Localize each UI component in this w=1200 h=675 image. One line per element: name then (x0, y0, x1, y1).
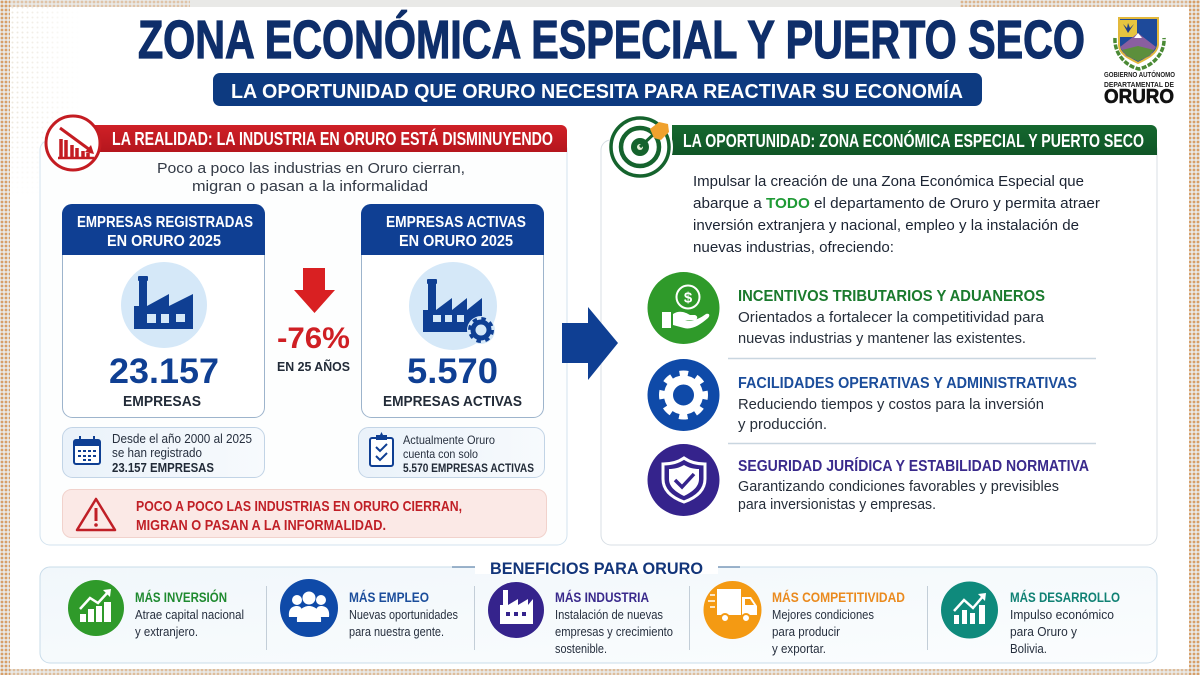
logo: Gobierno de Oruro (1104, 18, 1175, 108)
icon: factory with gear (409, 262, 497, 350)
benefit: inversion (68, 580, 244, 639)
intro paragraph: Impulsar la creación de una Zona Económica Especial que (693, 173, 1084, 190)
benefit: desarrollo: Bolivia. (1010, 642, 1047, 656)
arrow: red down (294, 268, 335, 313)
intro paragraph: inversión extranjera y nacional, empleo y la instalación de (693, 217, 1079, 234)
logo: Gobierno de Oruro: GOBIERNO AUTÓNOMO (1104, 70, 1175, 79)
benefit: inversion: MÁS INVERSIÓN (135, 590, 227, 605)
benefit: desarrollo: para Oruro y (1010, 625, 1078, 639)
icon: hand with coin: $ (684, 290, 693, 306)
item: seguridad: SEGURIDAD JURÍDICA Y ESTABILIDAD NORMATIVA (738, 458, 1089, 475)
benefit: empleo: MÁS EMPLEO (349, 590, 429, 605)
intro paragraph: nuevas industrias, ofreciendo: (693, 239, 894, 256)
note: registered companies: se han registrado (112, 446, 202, 460)
note: active companies (358, 428, 544, 478)
benefit: desarrollo (941, 582, 1120, 656)
item: incentivos (648, 272, 1045, 347)
benefit: desarrollo: MÁS DESARROLLO (1010, 590, 1120, 605)
subtitle banner: LA OPORTUNIDAD QUE ORURO NECESITA PARA REACTIVAR SU ECONOMÍA (231, 80, 963, 103)
note: active companies: cuenta con solo (403, 447, 478, 461)
icon: declining industry (46, 116, 100, 170)
benefit: empleo: Nuevas oportunidades (349, 608, 458, 622)
note: active companies: 5.570 EMPRESAS ACTIVAS (403, 461, 534, 475)
item: incentivos: INCENTIVOS TRIBUTARIOS Y ADUANEROS (738, 288, 1045, 305)
red heading bar (90, 125, 567, 152)
benefit: competitividad: para producir (772, 625, 840, 639)
card: empresas registradas: EMPRESAS (123, 393, 201, 410)
item: seguridad (648, 444, 1089, 516)
logo: Gobierno de Oruro: DEPARTAMENTAL DE (1104, 80, 1174, 89)
card: empresas registradas: EMPRESAS REGISTRADAS (77, 214, 253, 231)
alert box (62, 490, 546, 538)
benefit: industria: MÁS INDUSTRIA (555, 590, 649, 605)
panel box (40, 140, 567, 545)
note: registered companies: Desde el año 2000 al 2025 (112, 432, 252, 446)
card: empresas activas: EMPRESAS ACTIVAS (383, 393, 522, 410)
alert box: POCO A POCO LAS INDUSTRIAS EN ORURO CIERRAN, (136, 498, 462, 515)
icon: target with dart (609, 115, 673, 179)
benefit: empleo: para nuestra gente. (349, 625, 444, 639)
benefit: industria (488, 582, 673, 656)
icon: development chart (941, 582, 998, 638)
card: empresas activas (361, 204, 544, 418)
logo: Gobierno de Oruro: ORURO (1104, 86, 1174, 108)
item: facilidades: FACILIDADES OPERATIVAS Y ADMINISTRATIVAS (738, 375, 1077, 392)
benefit: competitividad: Mejores condiciones (772, 608, 874, 622)
icon: factory (121, 262, 207, 348)
icon: hand with coin (648, 272, 720, 344)
benefit: competitividad: y exportar. (772, 642, 826, 656)
item: seguridad: para inversionistas y empresas. (738, 496, 936, 513)
decline indicator: EN 25 AÑOS (277, 359, 350, 374)
card: empresas activas: 5.570 (407, 352, 498, 391)
icon: factory (488, 582, 544, 638)
benefit: industria: sostenible. (555, 642, 607, 656)
intro paragraph (693, 173, 1100, 256)
note: registered companies: 23.157 EMPRESAS (112, 461, 214, 475)
benefit: desarrollo: Impulso económico (1010, 608, 1114, 622)
panel: la realidad (40, 116, 567, 545)
arrow: reality to opportunity (562, 307, 618, 380)
benefit: industria: empresas y crecimiento (555, 625, 673, 639)
icon: truck (704, 581, 762, 639)
benefit: competitividad: MÁS COMPETITIVIDAD (772, 590, 905, 605)
green heading bar (672, 125, 1157, 155)
benefit: industria: Instalación de nuevas (555, 608, 663, 622)
icon: shield with check (648, 444, 720, 516)
benefit: empleo (280, 579, 458, 639)
panel: beneficios (40, 559, 1157, 663)
card: empresas registradas: 23.157 (109, 352, 219, 391)
icon: gear (648, 359, 720, 431)
alert box: MIGRAN O PASAN A LA INFORMALIDAD. (136, 517, 386, 534)
card: empresas registradas (62, 204, 265, 418)
intro paragraph: abarque a TODO el departamento de Oruro y permita atraer (693, 195, 1100, 212)
note: active companies: Actualmente Oruro (403, 433, 495, 447)
benefit: inversion: Atrae capital nacional (135, 608, 244, 622)
heading: BENEFICIOS PARA ORURO (490, 559, 703, 578)
panel: la oportunidad (601, 115, 1157, 545)
icon: growth chart (68, 580, 124, 636)
intro text (157, 160, 465, 195)
note: registered companies (62, 428, 264, 478)
item: facilidades (648, 359, 1077, 433)
intro text: Poco a poco las industrias en Oruro cierran, (157, 160, 465, 177)
card: empresas registradas: EN ORURO 2025 (107, 233, 221, 250)
item: incentivos: Orientados a fortalecer la competitividad para (738, 309, 1045, 326)
subtitle banner (213, 73, 982, 106)
red heading bar: LA REALIDAD: LA INDUSTRIA EN ORURO ESTÁ DISMINUYENDO (112, 128, 553, 149)
card: empresas activas: EN ORURO 2025 (399, 233, 513, 250)
icon: people (280, 579, 338, 637)
icon: warning triangle (77, 499, 115, 530)
item: facilidades: Reduciendo tiempos y costos para la inversión (738, 396, 1044, 413)
item: facilidades: y producción. (738, 416, 827, 433)
benefit: competitividad (704, 581, 905, 656)
icon: checklist (370, 432, 393, 466)
decline indicator: -76% (277, 322, 350, 355)
benefit: inversion: y extranjero. (135, 625, 198, 639)
card: empresas activas: EMPRESAS ACTIVAS (386, 214, 526, 231)
decline indicator (277, 268, 350, 374)
icon: coat of arms (1115, 18, 1164, 69)
item: incentivos: nuevas industrias y mantener las existentes. (738, 330, 1026, 347)
item: seguridad: Garantizando condiciones favorables y previsibles (738, 478, 1059, 495)
intro text: migran o pasan a la informalidad (192, 178, 428, 195)
icon: calendar (74, 436, 100, 464)
panel box (601, 140, 1157, 545)
